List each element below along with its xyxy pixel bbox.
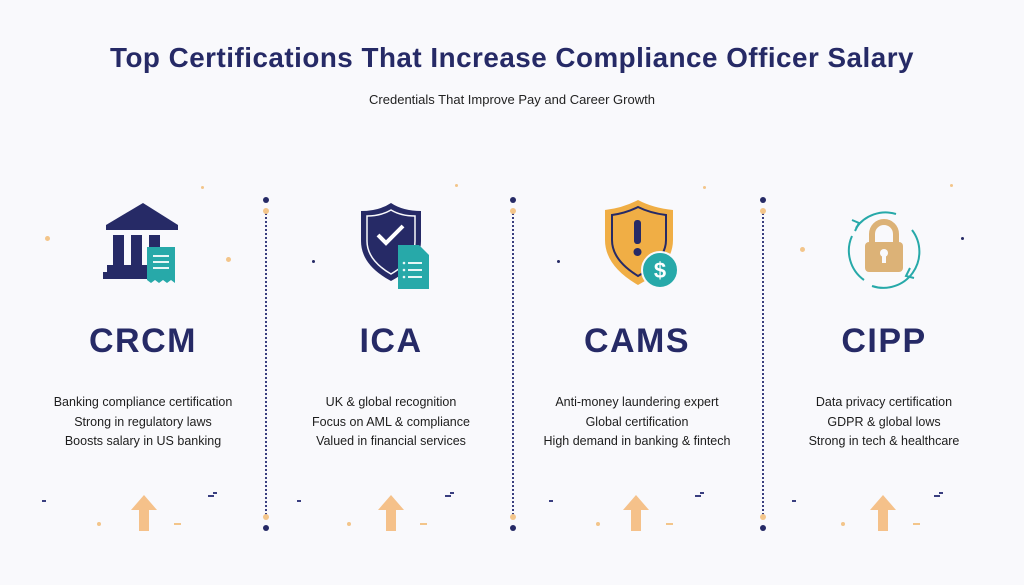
subtitle: Credentials That Improve Pay and Career Growth bbox=[369, 92, 655, 107]
divider 1 bbox=[265, 210, 269, 515]
icon: lock with refresh bbox=[848, 211, 920, 289]
arrow: up bbox=[623, 495, 649, 531]
icon: shield check document bbox=[361, 203, 429, 289]
text: CIPP description: Strong in tech & healthcare bbox=[809, 434, 959, 448]
text: ICA description: UK & global recognition bbox=[326, 395, 456, 409]
text: ICA description: Valued in financial services bbox=[316, 434, 466, 448]
icon: shield alert dollar bbox=[605, 200, 677, 287]
title: Top Certifications That Increase Compliance Officer Salary bbox=[110, 42, 914, 73]
text: ICA description bbox=[312, 395, 470, 448]
icon: bank bbox=[103, 203, 178, 283]
heading: CAMS: CAMS bbox=[584, 322, 690, 360]
text: ICA description: Focus on AML & compliance bbox=[312, 414, 470, 428]
text: CAMS description: High demand in banking & fintech bbox=[544, 434, 730, 448]
text: CIPP description: GDPR & global lows bbox=[827, 414, 941, 428]
text: CRCM description: Boosts salary in US banking bbox=[65, 434, 221, 448]
heading: CIPP: CIPP bbox=[841, 322, 927, 360]
text: CIPP description bbox=[809, 395, 959, 448]
divider 2 bbox=[512, 210, 516, 515]
arrow: up bbox=[378, 495, 404, 531]
panel: CAMS bbox=[544, 200, 730, 531]
text: CAMS description: Global certification bbox=[586, 414, 688, 428]
text: CRCM description: Strong in regulatory laws bbox=[74, 414, 212, 428]
divider 3 bbox=[762, 210, 766, 515]
icon: shield alert dollar: $ bbox=[654, 258, 666, 283]
text: CAMS description bbox=[544, 395, 730, 448]
heading: ICA: ICA bbox=[359, 322, 423, 360]
text: CRCM description: Banking compliance certification bbox=[54, 395, 232, 409]
panel: ICA bbox=[312, 203, 470, 531]
arrow: up bbox=[870, 495, 896, 531]
heading: CRCM: CRCM bbox=[89, 322, 197, 360]
text: CIPP description: Data privacy certification bbox=[816, 395, 952, 409]
text: CAMS description: Anti-money laundering expert bbox=[555, 395, 719, 409]
panel: CIPP bbox=[809, 211, 959, 531]
panel: CRCM bbox=[54, 203, 232, 531]
arrow: up bbox=[131, 495, 157, 531]
text: CRCM description bbox=[54, 395, 232, 448]
